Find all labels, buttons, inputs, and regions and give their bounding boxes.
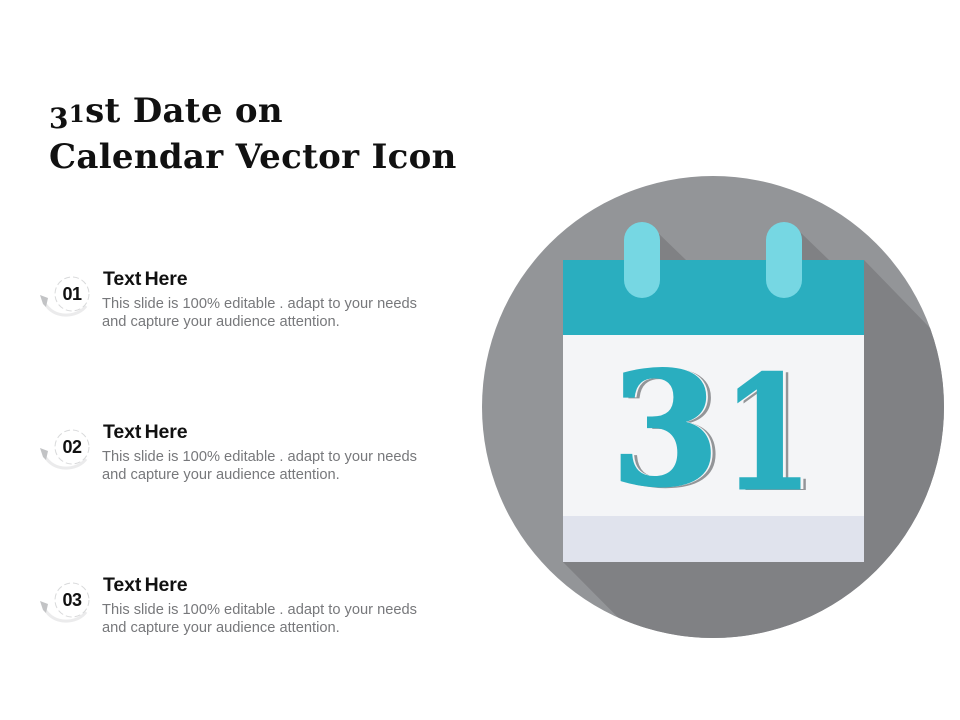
calendar page <box>563 335 864 516</box>
description 03: and capture your audience attention. <box>102 620 340 636</box>
date number 31: 3 <box>616 339 725 522</box>
title: 31st Date on <box>49 91 283 135</box>
date number 31: 1 <box>723 341 812 525</box>
heading 01: Text Here <box>103 268 188 290</box>
long shadow <box>563 232 944 638</box>
description 02 <box>102 449 417 483</box>
heading 03: Text Here <box>103 574 188 596</box>
badge 02 <box>40 430 90 470</box>
badge 01: 01 <box>62 284 82 304</box>
description 03: This slide is 100% editable . adapt to your needs <box>102 602 417 618</box>
badge 03: 03 <box>62 590 82 610</box>
icon: calendar in circle <box>482 176 944 638</box>
list item 01 <box>40 268 417 330</box>
description 01: and capture your audience attention. <box>102 314 340 330</box>
calendar footer <box>563 516 864 562</box>
badge 03 <box>40 582 90 622</box>
heading 02: Text Here <box>103 421 188 443</box>
badge 02: 02 <box>62 437 82 457</box>
date number 31: 3 <box>613 338 722 521</box>
date number 31: 3 <box>611 338 720 521</box>
calendar header <box>563 260 864 335</box>
badge 01 <box>40 276 90 316</box>
description 02: and capture your audience attention. <box>102 467 340 483</box>
description 02: This slide is 100% editable . adapt to your needs <box>102 449 417 465</box>
date number 31: 1 <box>726 341 815 525</box>
description 01 <box>102 296 417 330</box>
date number 31 <box>611 338 818 526</box>
date number 31: 1 <box>729 342 818 526</box>
left binding ring <box>624 222 660 298</box>
right binding ring <box>766 222 802 298</box>
description 01: This slide is 100% editable . adapt to your needs <box>102 296 417 312</box>
title: Calendar Vector Icon <box>49 137 457 177</box>
title <box>49 91 457 177</box>
description 03 <box>102 602 417 636</box>
list item 03 <box>40 574 417 636</box>
circle background <box>482 176 944 638</box>
list item 02 <box>40 421 417 483</box>
